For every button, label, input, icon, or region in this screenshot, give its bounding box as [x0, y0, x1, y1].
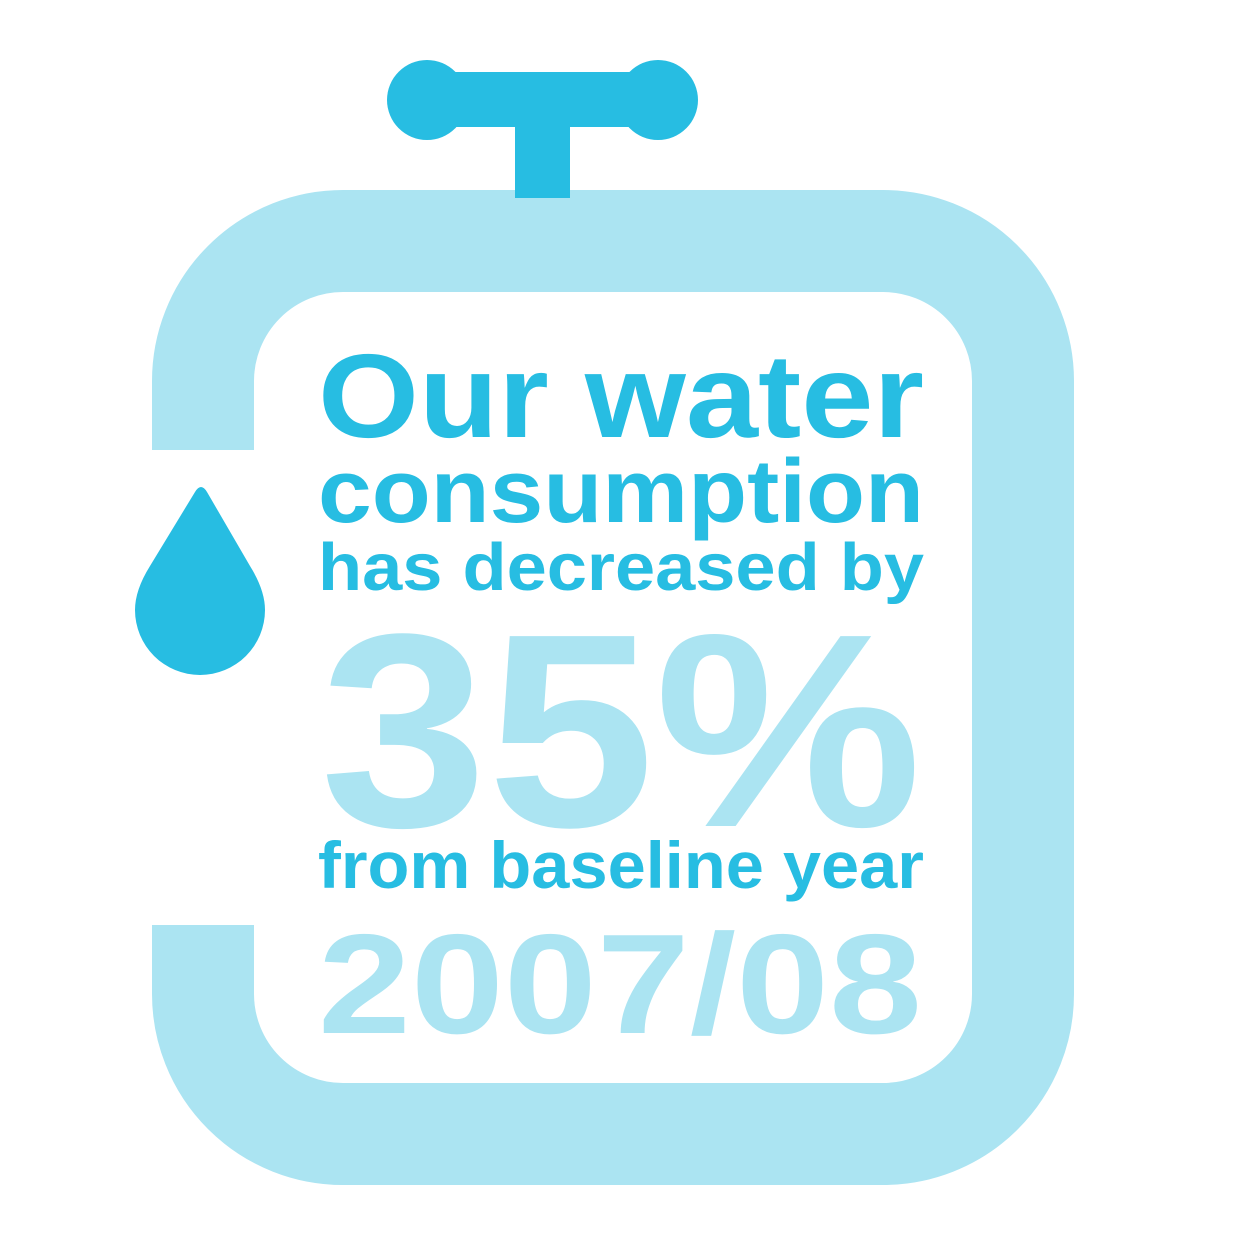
baseline year: 2007/08: 2007/08	[318, 905, 922, 1064]
headline text	[318, 330, 924, 605]
icon: water drop	[135, 487, 265, 675]
headline text: has decreased by	[318, 530, 924, 605]
icon: tap handle	[387, 60, 698, 198]
headline text: consumption	[318, 442, 924, 542]
big statistic: 35%: 35%	[320, 577, 922, 885]
pipe frame	[203, 241, 1023, 1134]
subtext: from baseline year: from baseline year	[318, 828, 924, 902]
headline text: Our water	[318, 330, 924, 463]
